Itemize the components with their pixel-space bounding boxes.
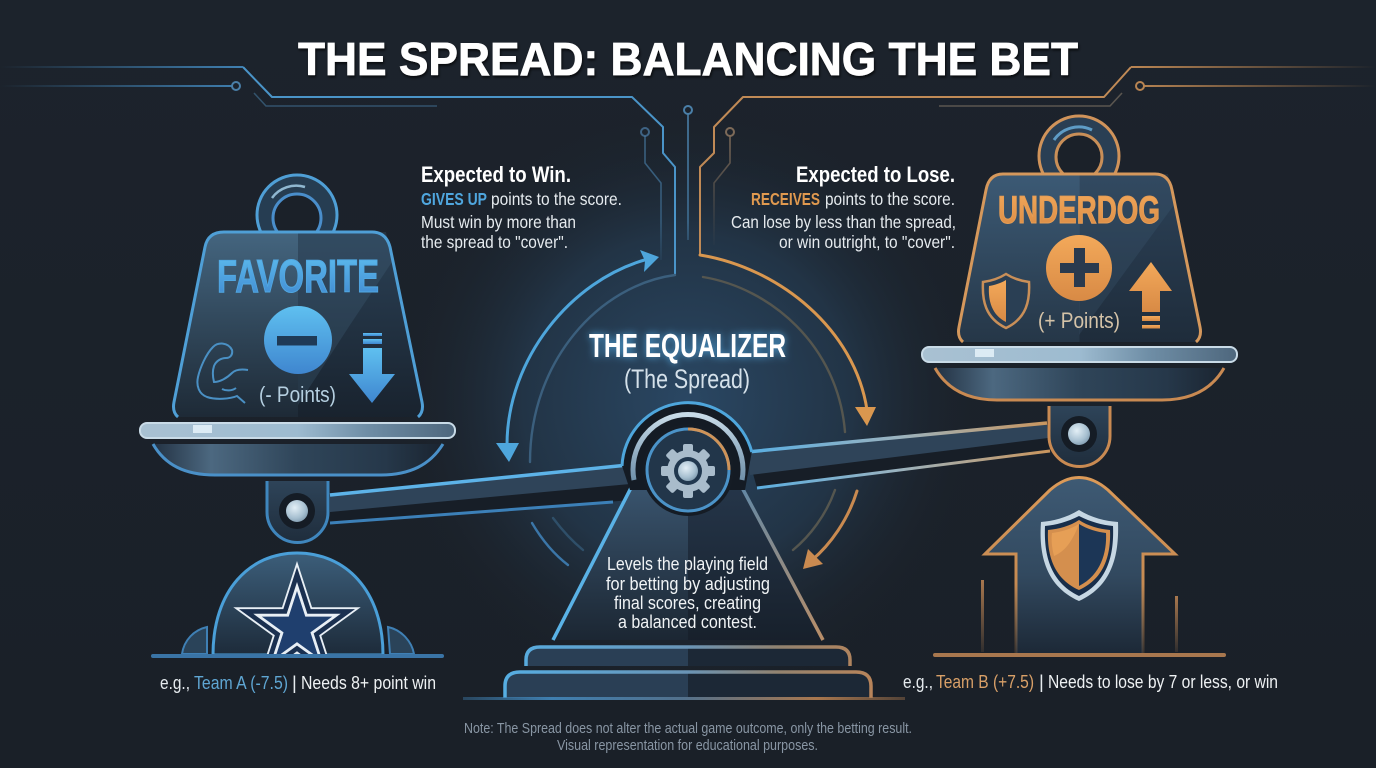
caption: team b example: Needs to lose by 7 or less, or win xyxy=(1048,671,1278,692)
icon: up arrow xyxy=(1129,262,1172,328)
icon: plus circle xyxy=(1046,235,1112,301)
subheading: the spread: (The Spread) xyxy=(624,364,750,394)
balance beam: left arm xyxy=(330,465,632,523)
arc: faint blue inner xyxy=(530,275,675,462)
fulcrum: stepped base xyxy=(463,647,905,700)
caption: team a example: Team A (-7.5) xyxy=(194,672,288,693)
fulcrum: pivot hub with gear xyxy=(622,403,752,514)
caption: team b example xyxy=(903,671,1278,692)
text: underdog explanation xyxy=(731,162,956,252)
icon: minus circle xyxy=(264,306,332,374)
weight ring xyxy=(257,175,337,255)
circuit lines: orange side xyxy=(700,67,1376,255)
heading: the equalizer: THE EQUALIZER xyxy=(589,328,786,365)
label: favorite: FAVORITE xyxy=(217,250,379,302)
text: favorite explanation: the spread to "cover". xyxy=(421,232,568,252)
arrow: orange curved xyxy=(700,255,876,426)
weight body xyxy=(958,174,1200,342)
label: plus points: (+ Points) xyxy=(1038,308,1120,333)
scale pan: favorite xyxy=(153,444,443,475)
team badge: shield house xyxy=(933,478,1226,657)
text: underdog explanation: Can lose by less than the spread, xyxy=(731,212,956,232)
scale tray: underdog xyxy=(922,347,1237,362)
hanger: underdog xyxy=(1049,406,1110,466)
icon: shield xyxy=(1041,510,1118,601)
weight: underdog xyxy=(958,116,1200,342)
cycle arrows around the equalizer xyxy=(496,250,876,569)
arrow: blue curved double-headed xyxy=(496,250,659,462)
scale pan: underdog xyxy=(935,368,1224,400)
title: THE SPREAD: BALANCING THE BET xyxy=(298,33,1078,85)
caption: team a example: Needs 8+ point win xyxy=(301,672,436,693)
footnote: Note: The Spread does not alter the actual game outcome, only the betting result. xyxy=(464,721,912,737)
text: equalizer description xyxy=(606,553,770,632)
caption: team b example: | xyxy=(1039,671,1044,692)
caption: team b example: e.g., xyxy=(903,671,933,692)
text: underdog explanation: points to the score. xyxy=(825,189,955,209)
caption: team a example: e.g., xyxy=(160,672,190,693)
icon: gear xyxy=(661,444,715,498)
fulcrum: triangle stand xyxy=(553,480,823,640)
weight: favorite xyxy=(174,175,422,417)
label: minus points: (- Points) xyxy=(259,382,336,407)
icon: flexed bicep xyxy=(197,344,248,403)
balance beam: right arm xyxy=(747,423,1050,488)
scale pan rim: favorite xyxy=(153,444,443,475)
weight ring xyxy=(1039,116,1119,196)
text: underdog explanation: or win outright, to "cover". xyxy=(779,232,955,252)
text: favorite explanation: Expected to Win. xyxy=(421,162,571,187)
text: favorite explanation xyxy=(421,162,622,252)
text: equalizer description: final scores, creating xyxy=(614,592,761,613)
scale pan rim: underdog xyxy=(935,368,1224,400)
circuit lines: blue side xyxy=(0,67,692,275)
arc: lower left ticks xyxy=(532,518,583,565)
footnote xyxy=(464,721,912,754)
text: favorite explanation: GIVES UP xyxy=(421,189,487,209)
icon: small shield xyxy=(983,274,1029,328)
caption: team b example: Team B (+7.5) xyxy=(936,671,1034,692)
team badge: star dome xyxy=(151,552,444,658)
arc: faint grey inner xyxy=(703,277,845,432)
caption: team a example xyxy=(160,672,436,693)
text: equalizer description: for betting by adjusting xyxy=(606,573,770,594)
text: favorite explanation: Must win by more than xyxy=(421,212,576,232)
scale tray: favorite xyxy=(140,423,455,438)
text: underdog explanation: RECEIVES xyxy=(751,189,820,209)
footnote: Visual representation for educational purposes. xyxy=(557,738,818,754)
text: equalizer description: Levels the playing field xyxy=(607,553,768,574)
caption: team a example: | xyxy=(292,672,297,693)
icon: down arrow xyxy=(349,333,395,403)
arrow: lower right orange xyxy=(793,490,857,569)
label: underdog: UNDERDOG xyxy=(998,189,1160,232)
weight body xyxy=(174,232,422,417)
icon: star xyxy=(233,561,361,654)
text: equalizer description: a balanced contest. xyxy=(618,611,757,632)
hanger: favorite xyxy=(267,481,328,542)
text: underdog explanation: Expected to Lose. xyxy=(796,162,955,187)
text: favorite explanation: points to the score. xyxy=(491,189,622,209)
